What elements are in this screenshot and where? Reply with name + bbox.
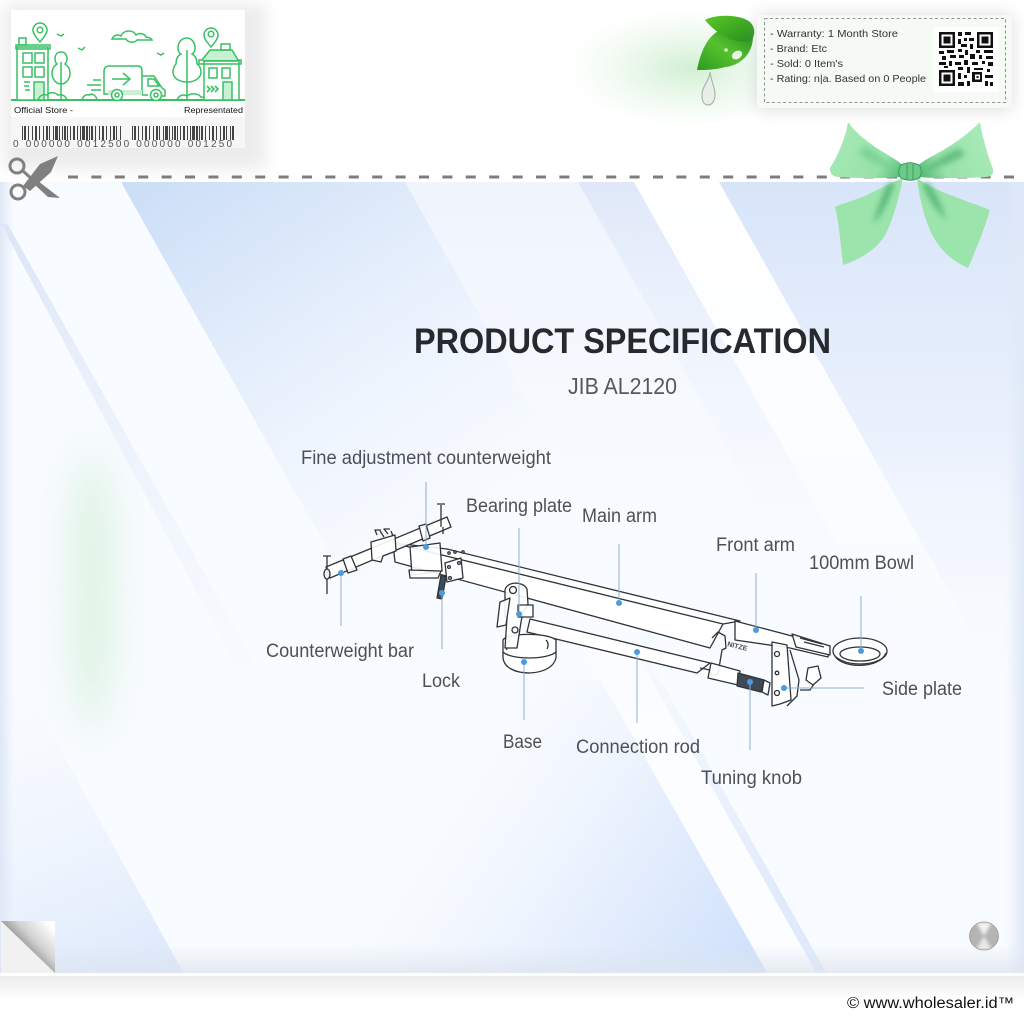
floor shadow under panel: [0, 976, 1024, 1000]
diagram labels: [266, 448, 962, 789]
info card shadow: [757, 15, 1012, 109]
leader lines: [341, 482, 864, 750]
diagram labels: Main arm: [582, 506, 657, 527]
lock: [437, 575, 446, 599]
diagram labels: Fine adjustment counterweight: [301, 448, 552, 469]
icon: green bow: [830, 122, 993, 268]
icon: scissors: [10, 156, 60, 199]
green glow behind leaf: [565, 8, 815, 128]
spec lines: - Sold: 0 Item's: [770, 58, 843, 70]
water drop: [702, 72, 715, 105]
spec lines: - Rating: n|a. Based on 0 People: [770, 73, 926, 85]
diagram: jib arm: [323, 504, 887, 706]
counterweight bar: [326, 517, 451, 578]
barcode bars: [22, 126, 234, 140]
QR code: [933, 27, 999, 92]
spec lines: - Warranty: 1 Month Store: [770, 28, 898, 40]
diagram labels: Lock: [422, 671, 460, 692]
label shadow: [4, 4, 266, 169]
diagram labels: Base: [503, 732, 542, 753]
info card: [757, 15, 1012, 108]
spec lines: [770, 28, 926, 85]
icon: leaves with water drop: [697, 16, 754, 105]
front bracket: [700, 632, 726, 676]
connection rod: [527, 619, 710, 673]
diagram labels: Front arm: [716, 535, 795, 556]
store label card: Representated: [184, 105, 243, 115]
diagram labels: Bearing plate: [466, 496, 572, 517]
diagram labels: Side plate: [882, 679, 962, 700]
tuning knob: [708, 663, 740, 685]
counterweight block: [410, 543, 442, 575]
diagram labels: Tuning knob: [701, 768, 802, 789]
cut line dashes: [68, 176, 1024, 178]
copyright footer: © www.wholesaler.id™: [847, 995, 1014, 1012]
barcode digits: 0 000000 0012500 000000 001250: [13, 139, 232, 150]
metal button: [970, 922, 998, 950]
base: [503, 634, 556, 673]
100mm bowl mount: [792, 634, 830, 655]
spec lines: - Brand: Etc: [770, 43, 827, 55]
side knob: [806, 666, 821, 685]
diagram labels: Counterweight bar: [266, 641, 415, 662]
diagram labels: 100mm Bowl: [809, 553, 914, 574]
page curl corner: [1, 921, 55, 973]
illustration: delivery street scene: [11, 23, 245, 100]
diagram labels: Connection rod: [576, 737, 700, 758]
diagram: jib arm: NITZE: [727, 641, 748, 653]
panel: diagonal light background: [0, 182, 1024, 974]
main arm: [393, 543, 740, 648]
front arm: [735, 621, 830, 657]
subtitle: JIB AL2120: [568, 373, 677, 399]
store label texts: Official Store -: [14, 105, 73, 115]
bearing plate: [505, 583, 528, 648]
marker dots: [338, 544, 864, 691]
title: PRODUCT SPECIFICATION: [414, 322, 831, 361]
panel bottom edge: [0, 973, 1024, 976]
store label card: [11, 10, 245, 150]
